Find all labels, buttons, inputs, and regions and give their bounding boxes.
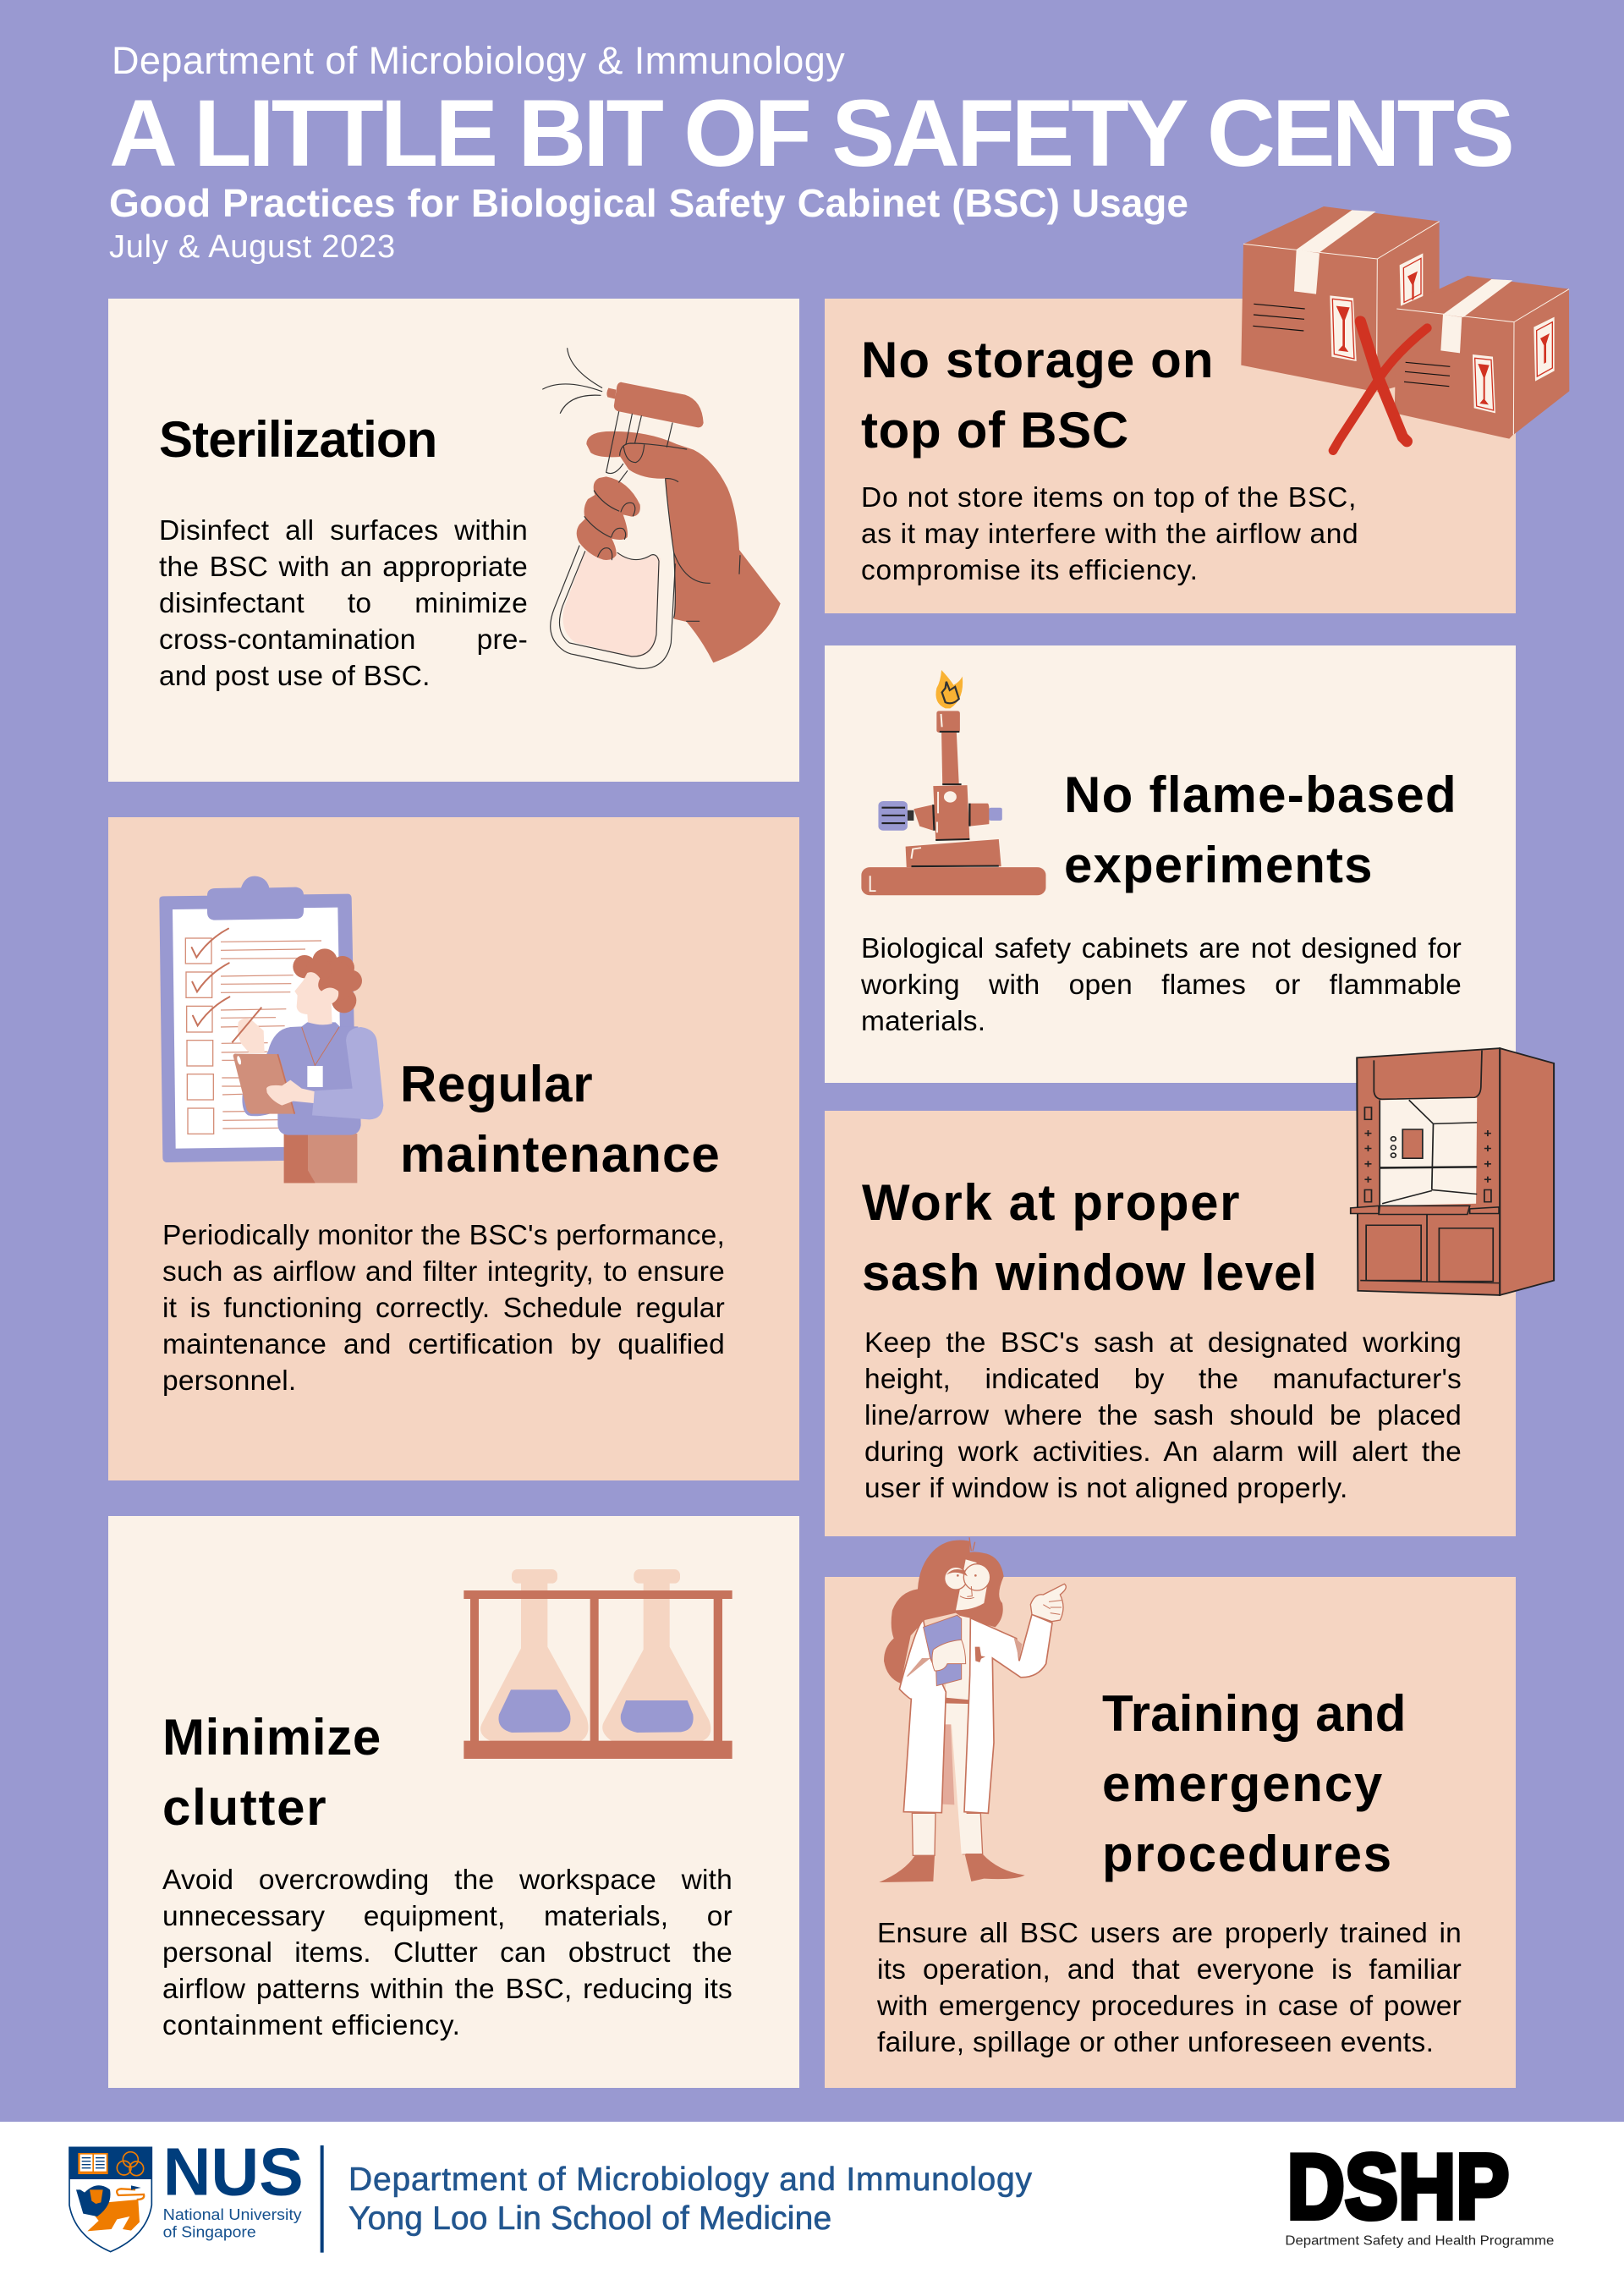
text: no storage: compromise its efficiency. [861,555,1199,586]
text: regular maintenance: personnel. [162,1365,296,1397]
icon: biological safety cabinet [1350,1047,1555,1296]
text: no flame-based: Biological safety cabinets are not designed for [861,933,1462,964]
icon: person with checklist [159,876,384,1183]
text: sterilization: the BSC with an appropriate [159,552,528,583]
heading: no flame-based: No flame-based [1064,766,1457,823]
heading: no storage [861,332,1215,459]
text: regular maintenance: maintenance and certification by qualified [162,1329,725,1360]
text: training: Ensure all BSC users are properly trained in [877,1918,1462,1949]
heading: minimize clutter: clutter [162,1779,327,1836]
text: no flame-based: working with open flames or flammable [861,969,1462,1001]
text: sash window level: height, indicated by the manufacturer's [864,1364,1462,1395]
text: sterilization: disinfectant to minimize [159,588,528,619]
heading: regular maintenance [400,1056,721,1183]
panel: training and emergency procedures [825,1577,1516,2088]
text: minimize clutter: airflow patterns within the BSC, reducing its [162,1974,732,2005]
heading: minimize clutter [162,1709,381,1836]
text: sterilization: Disinfect all surfaces within [159,515,528,547]
panel: regular maintenance [108,817,799,1480]
panel: minimize clutter [108,1516,799,2088]
heading: regular maintenance: Regular [400,1056,593,1112]
icon: crossed-out boxes [1241,206,1570,455]
heading: training: Training and [1102,1685,1407,1742]
text: no storage: as it may interfere with the airflow and [861,519,1358,550]
text: training: its operation, and that everyone is familiar [877,1954,1462,1986]
text: minimize clutter: Avoid overcrowding the workspace with [162,1865,732,1896]
text: minimize clutter: containment efficiency. [162,2010,461,2041]
heading: training: procedures [1102,1826,1393,1882]
date: July & August 2023 [109,229,396,265]
panel: no flame-based experiments [825,645,1516,1083]
text: sterilization: and post use of BSC. [159,661,431,692]
heading: no storage: top of BSC [861,402,1129,459]
heading: training [1102,1685,1407,1882]
icon: flasks in a rack [464,1569,732,1759]
logo: NUS [69,2134,324,2253]
text: regular maintenance: such as airflow and filter integrity, to ensure [162,1256,725,1288]
text: training [877,1918,1462,2058]
text: sash window level [864,1327,1462,1504]
text: sash window level: user if window is not aligned properly. [864,1473,1348,1504]
text: no storage [861,482,1358,586]
icon: hand with spray bottle [542,348,781,669]
text: regular maintenance: it is functioning correctly. Schedule regular [162,1293,725,1324]
heading: no flame-based: experiments [1064,837,1374,893]
header [109,39,1512,265]
footer [0,2122,1624,2274]
heading: sash window level: sash window level [862,1244,1318,1301]
heading: regular maintenance: maintenance [400,1126,721,1183]
logo: NUS: NUS [163,2134,304,2210]
department and school name [348,2161,1033,2237]
logo: DSHP: Department Safety and Health Programme [1285,2234,1554,2249]
heading: sash window level [862,1174,1318,1301]
text: minimize clutter [162,1865,732,2041]
icon: scientist in lab coat [880,1537,1067,1882]
text: minimize clutter: personal items. Clutter can obstruct the [162,1937,732,1969]
text: sterilization [159,515,528,692]
heading: sterilization: Sterilization [159,411,436,468]
logo: NUS: of Singapore [163,2223,256,2240]
department and school name: Yong Loo Lin School of Medicine [348,2200,831,2237]
heading: training: emergency [1102,1755,1384,1812]
text: training: failure, spillage or other unforeseen events. [877,2027,1434,2058]
text: sterilization: cross-contamination pre- [159,624,528,656]
text: sash window level: during work activities. An alarm will alert the [864,1436,1462,1468]
panel: no storage on top [825,299,1516,613]
subtitle: Good Practices for Biological Safety Cabinet (BSC) Usage [109,181,1188,225]
main title: A LITTLE BIT OF SAFETY CENTS [109,80,1512,186]
heading: no flame-based [1064,766,1457,893]
icon: bunsen burner [861,670,1045,895]
text: no flame-based [861,933,1462,1037]
logo: NUS: National University [163,2206,302,2223]
logo: DSHP: DSHP [1287,2136,1509,2238]
text: training: with emergency procedures in case of power [877,1991,1462,2022]
panel: work at proper sash window level [825,1111,1516,1536]
text: regular maintenance: Periodically monitor the BSC's performance, [162,1220,725,1251]
department line: Department of Microbiology & Immunology [112,39,845,82]
text: minimize clutter: unnecessary equipment, materials, or [162,1901,732,1932]
heading: no storage: No storage on [861,332,1215,388]
heading: minimize clutter: Minimize [162,1709,381,1766]
text: regular maintenance [162,1220,725,1397]
text: sash window level: Keep the BSC's sash at designated working [864,1327,1462,1359]
text: no flame-based: materials. [861,1006,985,1037]
text: sash window level: line/arrow where the sash should be placed [864,1400,1462,1431]
heading: sash window level: Work at proper [862,1174,1241,1231]
panel: sterilization [108,299,799,782]
department and school name: Department of Microbiology and Immunology [348,2161,1033,2198]
text: no storage: Do not store items on top of the BSC, [861,482,1357,514]
